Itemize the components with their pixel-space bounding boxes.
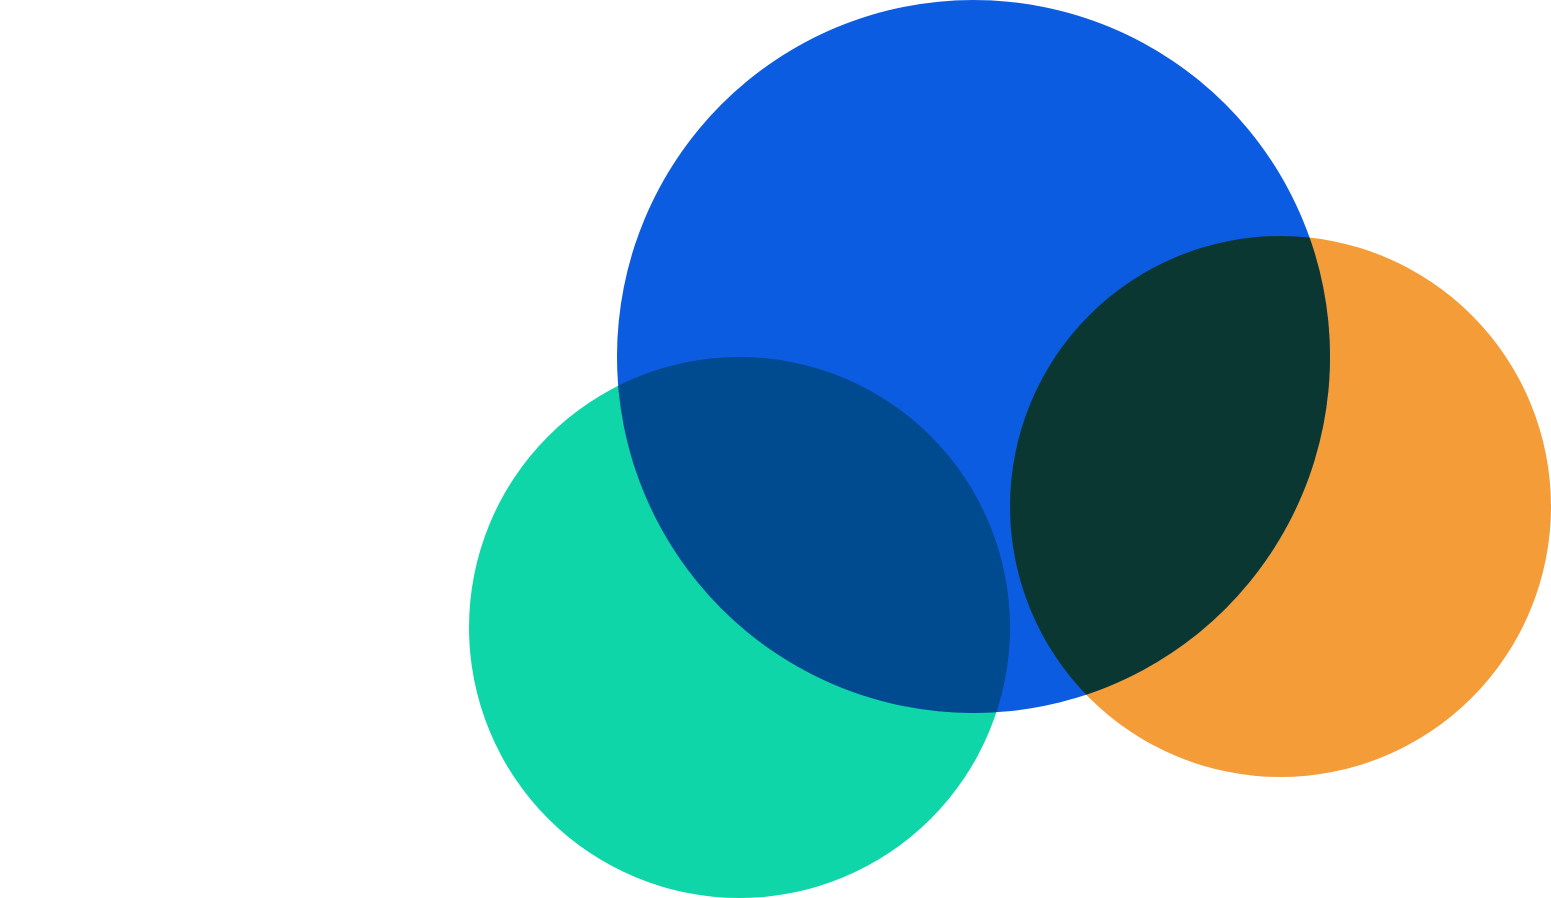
overlapping circles graphic	[469, 0, 1551, 898]
overlap: blue and orange	[1010, 236, 1330, 695]
overlap: blue and green	[618, 357, 1010, 713]
circle: orange	[1010, 236, 1551, 777]
circle: blue	[617, 0, 1330, 713]
circle: green	[469, 357, 1010, 898]
